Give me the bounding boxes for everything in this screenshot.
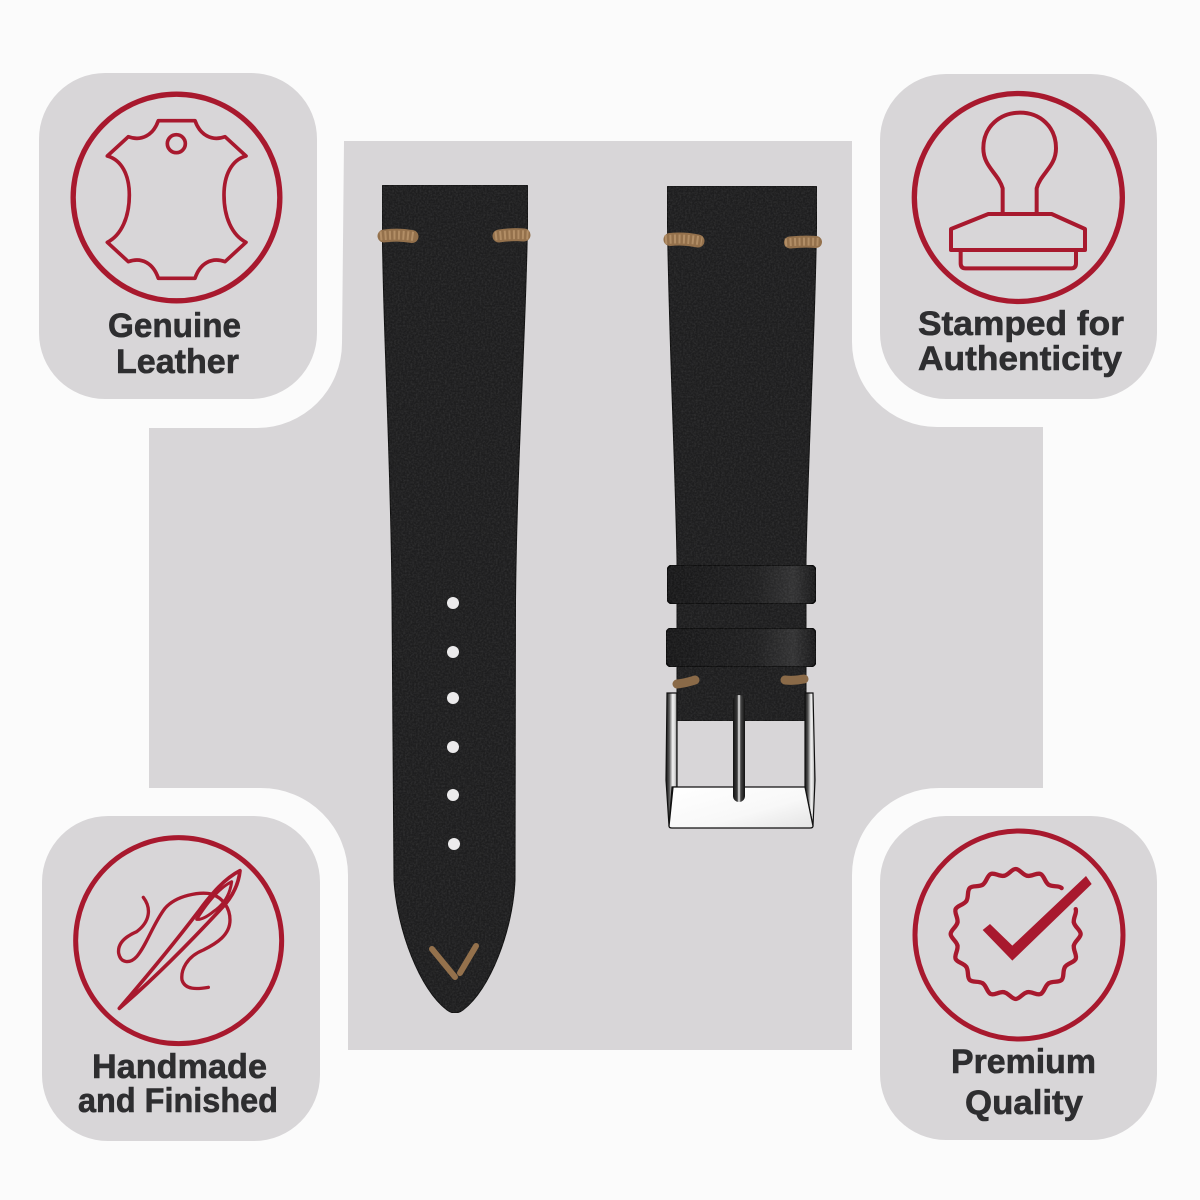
card [880,74,1157,399]
buckle plate [669,787,813,828]
icon: rubber stamp in circle [914,93,1122,301]
card [42,816,320,1141]
buckle [666,693,815,828]
heading: Quality [965,1084,1083,1122]
panel: Handmade and Finished [42,816,320,1141]
heading: Leather [116,343,239,381]
panel: Stamped for Authenticity [880,74,1157,399]
heading [78,1048,278,1120]
heading: and Finished [78,1082,278,1120]
strap holes [447,597,460,850]
heading [918,305,1124,378]
icon: needle and thread in circle [76,838,282,1044]
left watch strap (long piece) [380,185,529,1013]
icon: seal with check mark in circle [915,831,1123,1039]
heading: Handmade [92,1048,267,1086]
strap body [382,185,528,1013]
left buckle bar [666,693,677,826]
heading [108,307,241,381]
left top stitch [380,235,414,236]
panel: Genuine Leather [39,73,317,399]
central grey cross panel [149,141,1043,1050]
right top stitch [785,236,821,248]
right watch strap (buckle piece) [665,186,821,828]
right buckle bar [805,693,815,826]
lower keeper [666,628,816,667]
upper keeper [667,565,816,604]
heading: Authenticity [918,340,1122,378]
heading: Premium [951,1043,1096,1081]
buckle pin [733,695,745,802]
right top stitch [495,235,529,236]
lower right stitch [785,679,804,680]
card [39,73,317,399]
left top stitch [665,239,702,241]
heading: Stamped for [918,305,1124,343]
lower left stitch [677,680,695,684]
strap body [667,186,817,721]
heading: Genuine [108,307,241,345]
card [880,816,1157,1140]
icon: leather hide in circle [73,94,280,301]
V stitch at tip [432,946,476,977]
heading [951,1043,1096,1122]
panel: Premium Quality [880,816,1157,1140]
